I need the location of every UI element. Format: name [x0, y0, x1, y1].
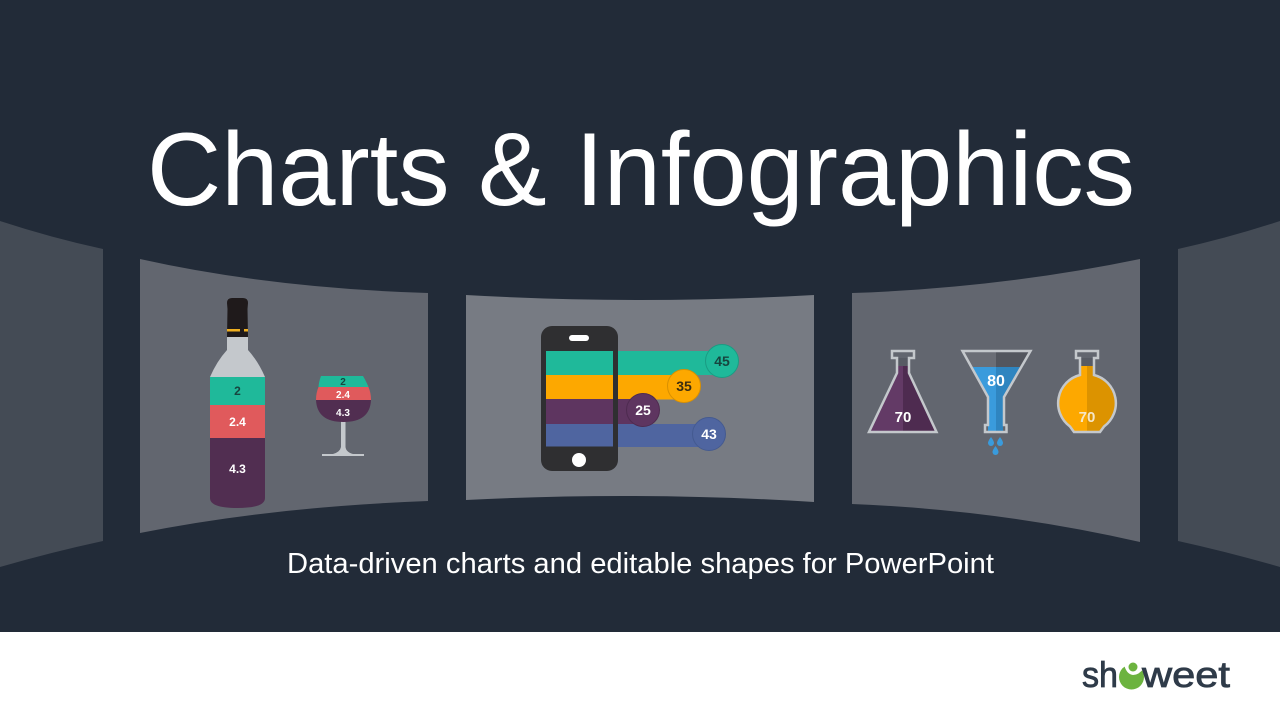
footer band [0, 632, 1280, 720]
glass values: 4.3 [336, 408, 350, 419]
glass values: 2.4 [336, 390, 350, 401]
panel: wine charts [140, 259, 428, 533]
title: Charts & Infographics [147, 112, 1135, 228]
icon: conical flask [869, 351, 936, 432]
icon: phone [541, 326, 618, 471]
bar: orange 35: 35 [676, 378, 692, 394]
panel: lab flasks [852, 259, 1140, 542]
icon: wine bottle chart [210, 298, 265, 508]
glass values [336, 377, 350, 419]
bar: blue 43: 43 [701, 426, 717, 442]
logo: showeet: weet [1141, 654, 1230, 695]
bottle values [229, 384, 246, 476]
panel: far left [0, 221, 103, 567]
panel: far right [1178, 221, 1280, 567]
bottle values: 2 [234, 384, 241, 398]
bottle values: 2.4 [229, 415, 246, 429]
bar: orange 35 [610, 370, 700, 402]
glass values: 2 [340, 377, 346, 388]
logo: showeet [1082, 654, 1230, 695]
bar: blue 43 [610, 418, 726, 450]
icon: funnel: 80 [987, 373, 1005, 390]
bar: purple 25: 25 [635, 402, 651, 418]
icon: logo mark [1119, 661, 1144, 690]
icon: round flask: 70 [1079, 409, 1095, 426]
panel: phone chart [466, 295, 814, 502]
logo: showeet: sh [1082, 654, 1118, 695]
bar: purple 25 [610, 394, 660, 426]
icon: conical flask: 70 [895, 409, 911, 426]
icon: drops [988, 437, 1003, 455]
icon: funnel [962, 351, 1030, 455]
bar: teal 45: 45 [714, 353, 730, 369]
bar: teal 45 [610, 344, 738, 378]
icon: round flask [1058, 351, 1116, 432]
icon: wine glass chart [316, 376, 371, 456]
bottle values: 4.3 [229, 462, 246, 476]
subtitle: Data-driven charts and editable shapes for PowerPoint [287, 548, 994, 580]
